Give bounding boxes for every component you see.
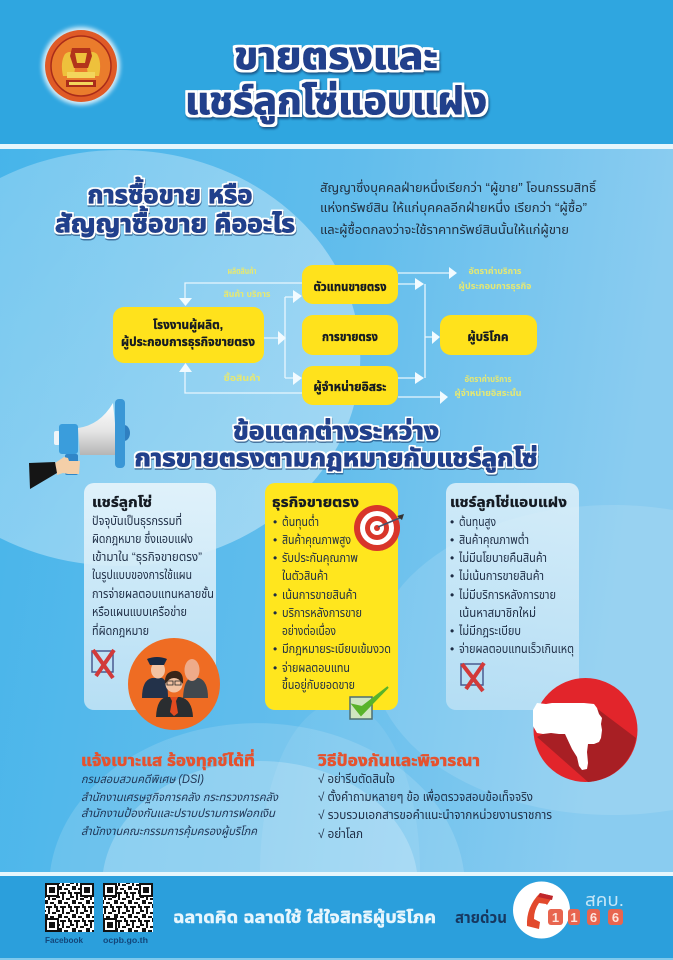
panel: disguised scheme: • <box>450 642 454 656</box>
text block: where to report: สำนักงานคณะกรรมการคุ้มครองผู้บริโภค <box>81 825 258 839</box>
panel: direct selling: ขึ้นอยู่กับยอดขาย <box>282 676 355 692</box>
box: consumer <box>440 315 537 355</box>
text block: definition: และผู้ซื้อตกลงว่าจะใช้ราคาทรัพย์สินนั้นให้แก่ผู้ขาย <box>320 221 569 237</box>
footer band <box>0 872 673 960</box>
icon: hotline badge: สคบ. <box>585 890 624 910</box>
text block: prevention: √ รวบรวมเอกสารขอคำแนะนำจากหน่วยงานราชการ <box>318 808 552 822</box>
heading: differences: การขายตรงตามกฎหมายกับแชร์ลูกโซ่ <box>134 444 538 473</box>
box: agent <box>302 265 398 304</box>
box: producer: ผู้ประกอบการธุรกิจขายตรง <box>121 335 255 350</box>
panel: disguised scheme: • <box>450 551 454 565</box>
flow labels: ซื้อสินค้า <box>224 372 261 383</box>
icon: hotline badge: 6 <box>612 910 619 925</box>
panel: direct selling: มีกฎหมายระเบียบเข้มงวด <box>282 642 391 656</box>
heading: what is a sale: สัญญาซื้อขาย คืออะไร <box>55 206 295 238</box>
panel: disguised scheme: ไม่มีนโยบายคืนสินค้า <box>458 551 547 565</box>
panel: disguised scheme: ไม่เน้นการขายสินค้า <box>458 569 544 583</box>
panel: direct selling: • <box>273 661 277 675</box>
panel: disguised scheme: ไม่มีบริการหลังการขาย <box>458 588 556 602</box>
icon: hotline badge: 1 <box>552 910 559 925</box>
panel: disguised scheme: สินค้าคุณภาพต่ำ <box>459 531 529 547</box>
flow labels: อัตราค่าบริการ <box>464 373 512 384</box>
flow labels: ผู้จำหน่ายอิสระนั้น <box>454 387 522 398</box>
flow arrowheads <box>179 267 457 404</box>
heading: differences <box>134 417 538 473</box>
text block: definition: สัญญาซึ่งบุคคลฝ่ายหนึ่งเรียกว่า “ผู้ขาย” โอนกรรมสิทธิ์ <box>320 179 596 195</box>
QR: Facebook: Facebook <box>45 935 83 945</box>
panel: disguised scheme: • <box>450 533 454 547</box>
panel: disguised scheme: • <box>450 624 454 638</box>
panel: disguised scheme: ไม่มีกฎระเบียบ <box>458 624 521 638</box>
panel: disguised scheme: • <box>450 569 454 583</box>
panel: direct selling: ธุรกิจขายตรง <box>272 495 359 511</box>
icon: hotline badge: 1 <box>570 910 578 925</box>
box: agent: ตัวแทนขายตรง <box>314 280 387 294</box>
text block: prevention: √ อย่าโลภ <box>318 827 363 841</box>
flow labels: อัตราค่าบริการ <box>468 265 522 276</box>
panel: pyramid scheme: ผิดกฎหมาย ซึ่งแอบแฝง <box>92 530 193 546</box>
panel: pyramid scheme: เข้ามาใน “ธุรกิจขายตรง” <box>92 550 202 564</box>
text block: where to report: กรมสอบสวนคดีพิเศษ (DSI) <box>81 773 204 786</box>
flow labels: สินค้า บริการ <box>224 289 271 299</box>
panel: disguised scheme: • <box>450 588 454 602</box>
panel: pyramid scheme: ที่ผิดกฎหมาย <box>92 622 149 638</box>
icon: cross box <box>92 650 114 678</box>
slogan: ฉลาดคิด ฉลาดใช้ ใส่ใจสิทธิผู้บริโภค <box>173 907 436 928</box>
panel: disguised scheme: เน้นหาสมาชิกใหม่ <box>459 606 536 620</box>
flow labels: ผลิตสินค้า <box>228 266 257 276</box>
heading: what is a sale: การซื้อขาย หรือ <box>88 177 252 209</box>
title: แชร์ลูกโซ่แอบแฝง <box>185 81 487 124</box>
panel: direct selling: • <box>273 642 277 656</box>
icon: hotline badge: 6 <box>590 910 597 925</box>
box: distributor: ผู้จำหน่ายอิสระ <box>314 380 386 395</box>
text block: where to report: แจ้งเบาะแส ร้องทุกข์ได้ที่ <box>81 749 255 770</box>
box: direct selling: การขายตรง <box>322 330 378 344</box>
flow chart <box>113 265 537 405</box>
box: direct selling <box>302 315 398 355</box>
box: producer <box>113 307 264 363</box>
panel: direct selling: เน้นการขายสินค้า <box>282 588 357 602</box>
panel: direct selling: ต้นทุนต่ำ <box>282 513 319 529</box>
panel: disguised scheme: • <box>450 515 454 529</box>
box: producer: โรงงานผู้ผลิต, <box>153 318 223 333</box>
panel: direct selling: • <box>273 515 277 529</box>
panel: direct selling: • <box>273 533 277 547</box>
text block: prevention: √ ตั้งคำถามหลายๆ ข้อ เพื่อตรวจสอบข้อเท็จจริง <box>318 788 533 804</box>
panel: direct selling: • <box>273 588 277 602</box>
text block: prevention: วิธีป้องกันและพิจารณา <box>318 752 480 770</box>
panel: pyramid scheme: ในรูปแบบของการใช้แผน <box>92 568 192 582</box>
panel: pyramid scheme: ปัจจุบันเป็นธุรกรรมที่ <box>92 512 182 528</box>
icon: seal logo <box>42 27 120 105</box>
text block: definition: แห่งทรัพย์สิน ให้แก่บุคคลอีกฝ่ายหนึ่ง เรียกว่า “ผู้ซื้อ” <box>320 199 587 215</box>
icon: check box <box>350 687 388 719</box>
icon: people circle <box>128 638 220 730</box>
flow labels: ผู้ประกอบการธุรกิจ <box>458 281 532 291</box>
QR: website: ocpb.go.th <box>103 935 148 945</box>
header band <box>0 0 673 149</box>
text block: prevention <box>318 752 552 841</box>
flow labels <box>224 265 532 398</box>
text block: where to report: สำนักงานเศรษฐกิจการคลัง กระทรวงการคลัง <box>81 791 279 804</box>
icon: target <box>354 505 404 551</box>
title <box>185 36 487 124</box>
icon: hotline badge <box>513 882 624 938</box>
panel: direct selling: • <box>273 606 277 620</box>
heading: differences: ข้อแตกต่างระหว่าง <box>233 417 439 445</box>
heading: what is a sale <box>55 177 295 238</box>
panel: direct selling: สินค้าคุณภาพสูง <box>282 533 351 547</box>
panel: pyramid scheme: แชร์ลูกโซ่ <box>92 494 152 512</box>
panel: disguised scheme <box>446 483 579 710</box>
text block: prevention: √ อย่ารีบตัดสินใจ <box>318 772 395 786</box>
text block: definition <box>320 179 596 237</box>
hotline label: สายด่วน <box>455 909 507 927</box>
panel: disguised scheme: ต้นทุนสูง <box>459 515 496 529</box>
icon: cross box <box>461 663 484 691</box>
QR: Facebook <box>45 883 94 945</box>
QR: website <box>103 883 153 945</box>
panel: pyramid scheme: การจ่ายผลตอบแทนหลายชั้น <box>92 586 214 601</box>
box: consumer: ผู้บริโภค <box>468 330 508 345</box>
text block: where to report <box>81 749 279 839</box>
text block: where to report: สำนักงานป้องกันและปราบปรามการฟอกเงิน <box>81 807 276 820</box>
box: distributor <box>302 366 398 405</box>
panel: direct selling: • <box>273 551 277 565</box>
icon: thumbs down <box>533 678 638 782</box>
flow connectors <box>185 273 451 397</box>
panel: direct selling <box>265 483 404 719</box>
panel: disguised scheme: แชร์ลูกโซ่แอบแฝง <box>450 494 567 512</box>
panel: pyramid scheme <box>84 483 220 730</box>
panel: disguised scheme: จ่ายผลตอบแทนเร็วเกินเหตุ <box>459 642 574 656</box>
panel: direct selling: บริการหลังการขาย <box>282 606 362 620</box>
panel: direct selling: รับประกันคุณภาพ <box>282 551 358 565</box>
panel: direct selling: ในตัวสินค้า <box>282 569 328 583</box>
title: ขายตรงและ <box>234 36 438 78</box>
panel: pyramid scheme: หรือแผนแบบเครือข่าย <box>92 605 187 619</box>
panel: direct selling: จ่ายผลตอบแทน <box>282 661 350 675</box>
icon: megaphone <box>29 399 130 489</box>
panel: direct selling: อย่างต่อเนื่อง <box>282 622 336 638</box>
